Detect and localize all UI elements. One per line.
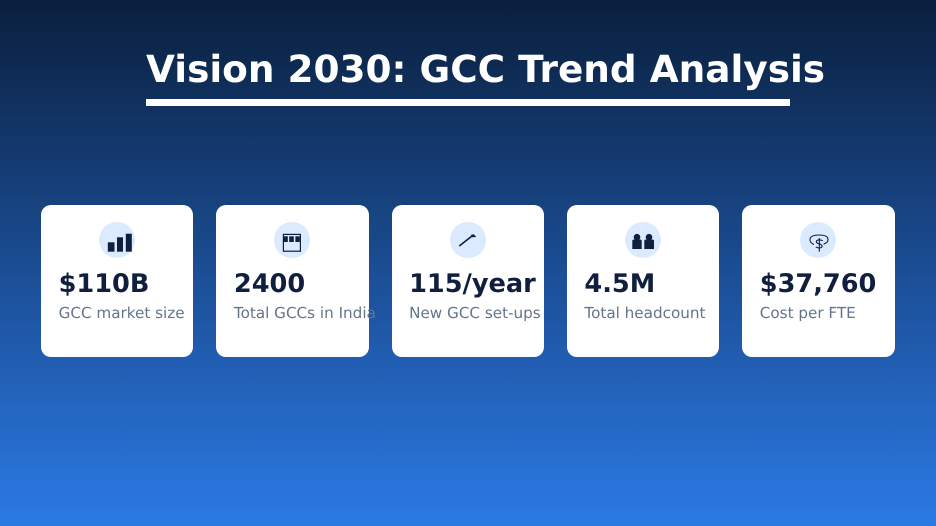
value: 115/year bbox=[409, 269, 536, 299]
panel: total headcount bbox=[567, 205, 719, 357]
label: Total GCCs in India bbox=[234, 304, 376, 322]
label: New GCC set-ups bbox=[409, 304, 541, 322]
label: Total headcount bbox=[584, 304, 705, 322]
icon: dollar cloud bbox=[800, 222, 836, 258]
panel: GCC market size bbox=[41, 205, 193, 357]
icon: building bbox=[274, 222, 310, 258]
panel: new GCC set-ups bbox=[392, 205, 544, 357]
panel: total GCCs in India bbox=[216, 205, 369, 357]
panel: cost per FTE bbox=[742, 205, 895, 357]
value: $110B bbox=[59, 269, 149, 299]
label: GCC market size bbox=[59, 304, 185, 322]
title underline bbox=[146, 99, 790, 106]
value: 4.5M bbox=[584, 269, 655, 299]
icon: bar chart bbox=[99, 222, 135, 258]
icon: people bbox=[625, 222, 661, 258]
icon: trend line bbox=[450, 222, 486, 258]
label: Cost per FTE bbox=[760, 304, 856, 322]
value: 2400 bbox=[234, 269, 305, 299]
title: Vision 2030: GCC Trend Analysis bbox=[146, 47, 825, 91]
value: $37,760 bbox=[760, 269, 876, 299]
